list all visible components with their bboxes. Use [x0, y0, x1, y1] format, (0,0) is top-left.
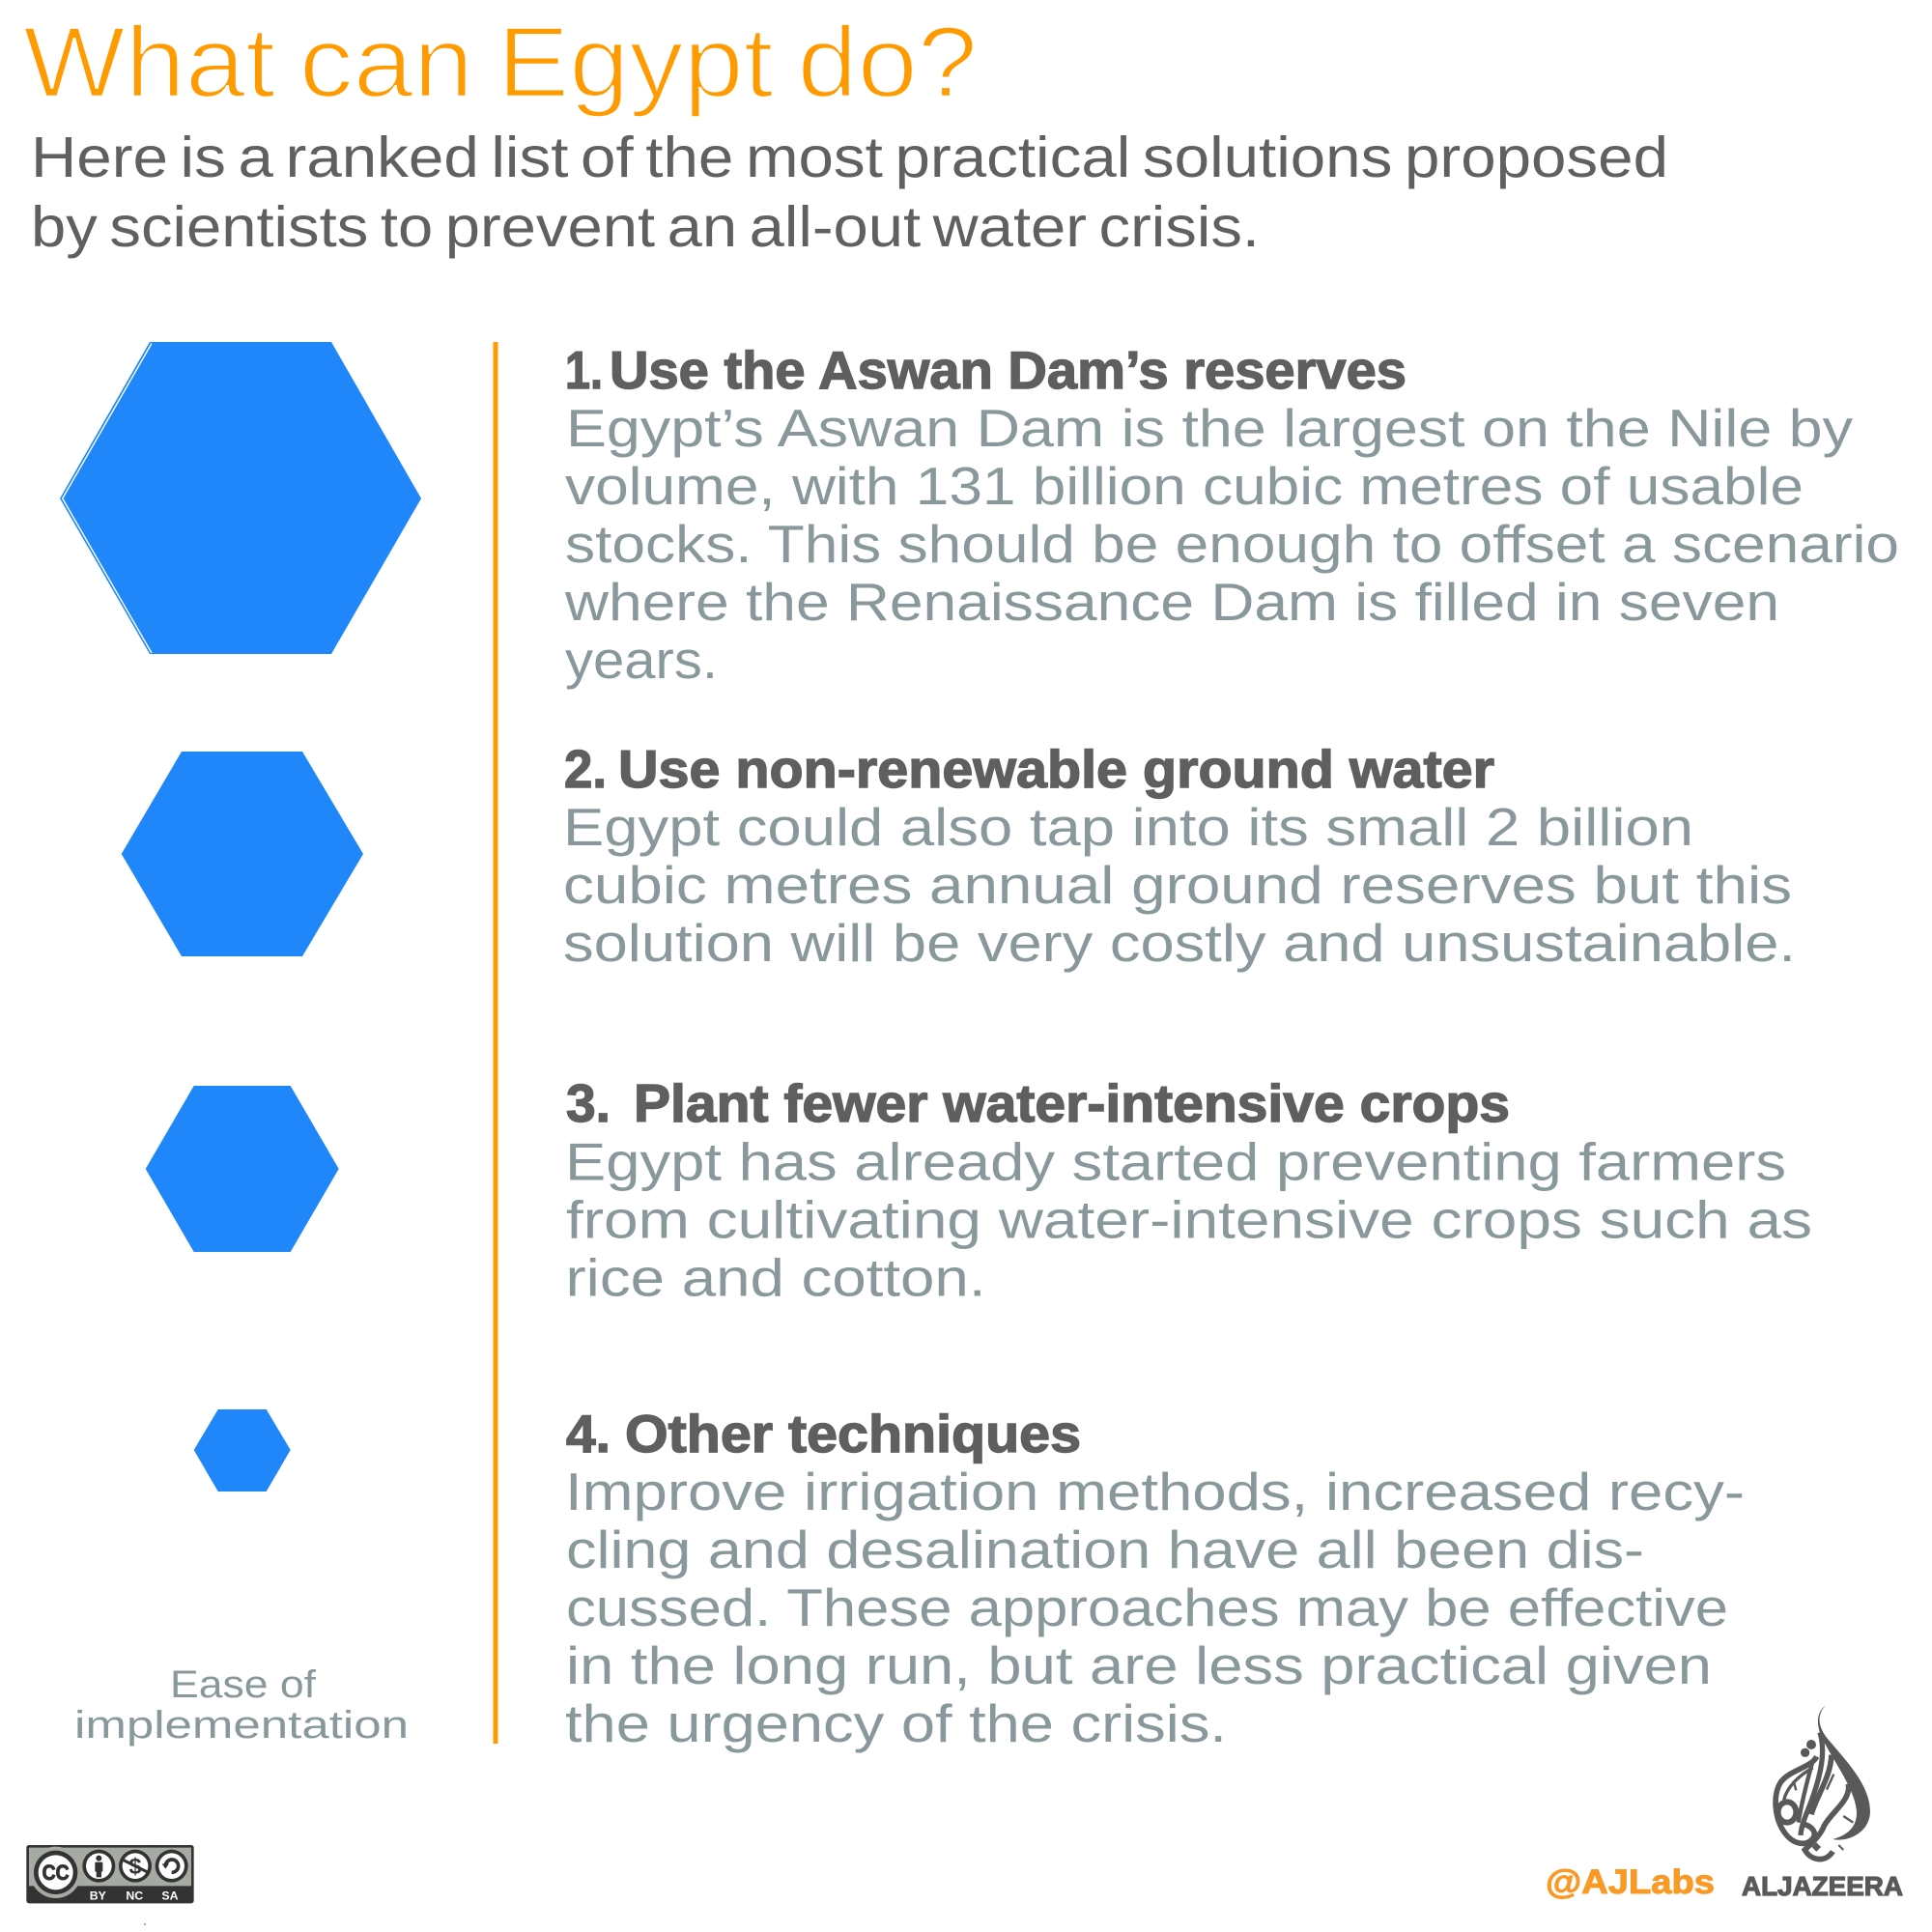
solution 2 [563, 739, 1796, 973]
solution 4: in the long run, but are less practical given [566, 1635, 1712, 1695]
subtitle: by scientists to prevent an all-out water crisis. [31, 195, 1260, 259]
solution 3: from cultivating water-intensive crops such as [566, 1190, 1812, 1250]
solution 1: where the Renaissance Dam is filled in seven [564, 572, 1779, 632]
solution 2: cubic metres annual ground reserves but this [563, 855, 1792, 915]
icon: Al Jazeera calligraphy logo [1776, 1705, 1870, 1860]
icon: hexagon rank 3 [146, 1086, 339, 1252]
solution 3: rice and cotton. [566, 1248, 985, 1308]
solution 3: Plant fewer water-intensive crops [634, 1073, 1510, 1133]
icon: hexagon rank 2 [122, 752, 363, 956]
solution 3: 3. [566, 1073, 611, 1133]
solution 1: years. [565, 630, 718, 690]
solution 1: stocks. This should be enough to offset a scenario [565, 514, 1899, 574]
subtitle: Here is a ranked list of the most practical solutions proposed [31, 126, 1668, 189]
icon: creative commons badge [26, 1845, 194, 1903]
solution 3 [565, 1073, 1812, 1308]
solution 4: the urgency of the crisis. [565, 1693, 1227, 1753]
hexagon legend: ease of implementation: Ease of [170, 1663, 317, 1706]
stray dot [144, 1923, 146, 1925]
solution 4: cussed. These approaches may be effective [566, 1577, 1728, 1637]
icon: creative commons badge: $ [128, 1854, 141, 1879]
solution 2: Use non-renewable ground water [618, 739, 1494, 799]
solution 1: Use the Aswan Dam’s reserves [610, 340, 1406, 400]
solution 2: 2. [564, 739, 607, 799]
solution 2: Egypt could also tap into its small 2 billion [563, 797, 1693, 857]
solution 4: cling and desalination have all been dis- [566, 1520, 1644, 1579]
solution 3: Egypt has already started preventing farmers [565, 1132, 1786, 1192]
subtitle [31, 126, 1668, 259]
title: What can Egypt do? [23, 7, 978, 119]
wordmark: ALJAZEERA: ALJAZEERA [1742, 1871, 1903, 1901]
solution 1: 1. [565, 340, 603, 400]
icon: hexagon rank 4 [194, 1409, 291, 1492]
icon: creative commons badge: BY [90, 1889, 107, 1903]
solution 4: 4. [566, 1404, 611, 1463]
solution 4: Other techniques [625, 1404, 1081, 1463]
icon: creative commons badge: CC [43, 1861, 70, 1885]
solution 2: solution will be very costly and unsustainable. [563, 913, 1796, 973]
hexagon legend: ease of implementation [74, 1663, 409, 1747]
icon: creative commons badge: SA [161, 1889, 179, 1903]
hexagon legend: ease of implementation: implementation [74, 1704, 409, 1747]
solution 1: Egypt’s Aswan Dam is the largest on the Nile by [566, 398, 1854, 458]
solution 1: volume, with 131 billion cubic metres of usable [565, 456, 1804, 516]
solution 1 [564, 340, 1899, 690]
vertical divider line [493, 342, 498, 1744]
solution 4: Improve irrigation methods, increased recy- [565, 1462, 1745, 1521]
icon: hexagon rank 1 [60, 342, 421, 654]
solution 4 [565, 1404, 1745, 1753]
credit: @AJLabs: @AJLabs [1546, 1863, 1715, 1901]
icon: creative commons badge: NC [126, 1889, 143, 1903]
